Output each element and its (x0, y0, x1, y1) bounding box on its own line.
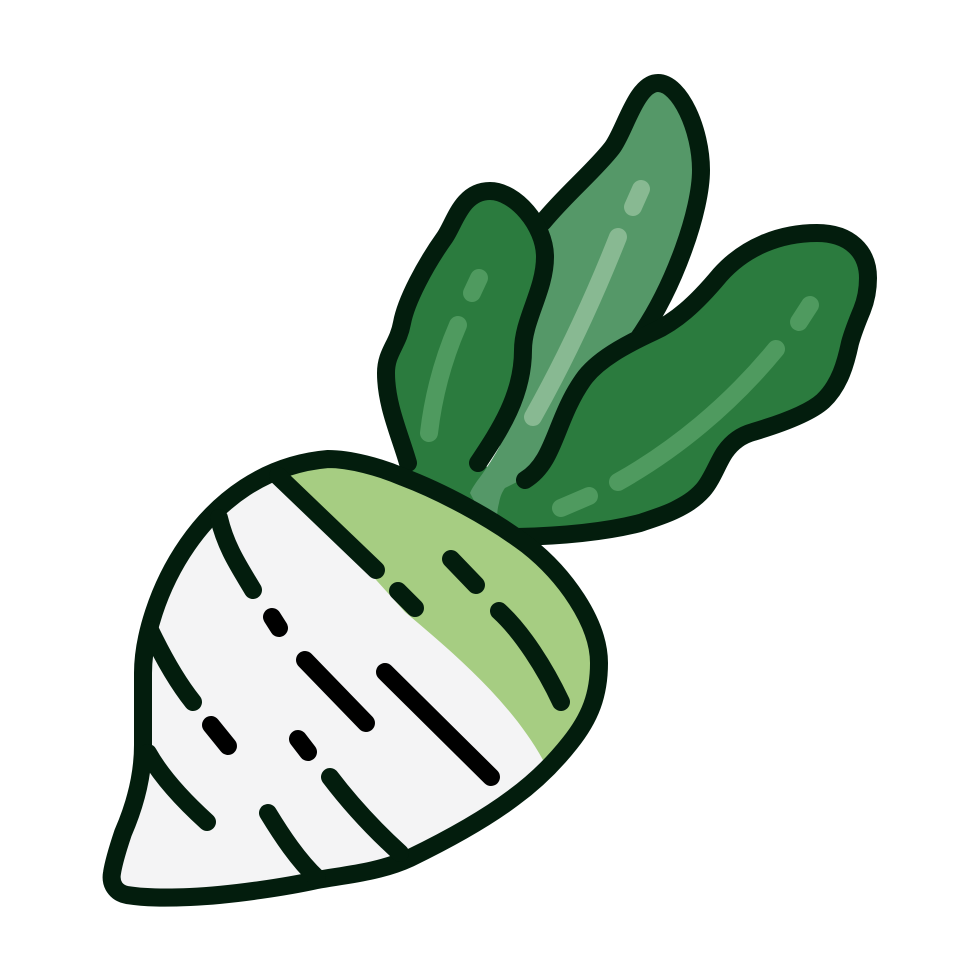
dark skin marks (148, 476, 561, 878)
leaf stem (470, 370, 560, 522)
back leaf highlights (533, 189, 641, 417)
back leaf (500, 83, 701, 480)
left leaf outline (386, 191, 545, 463)
right leaf outline (517, 233, 868, 537)
green crown (290, 468, 590, 760)
left leaf highlights (429, 278, 479, 433)
black skin marks (211, 617, 491, 777)
icon: turnip illustration (102, 74, 877, 907)
turnip outline (112, 459, 599, 898)
right leaf fill (490, 233, 868, 537)
turnip body (112, 440, 625, 898)
left leaf fill (386, 191, 545, 505)
right leaf highlights (561, 305, 810, 508)
